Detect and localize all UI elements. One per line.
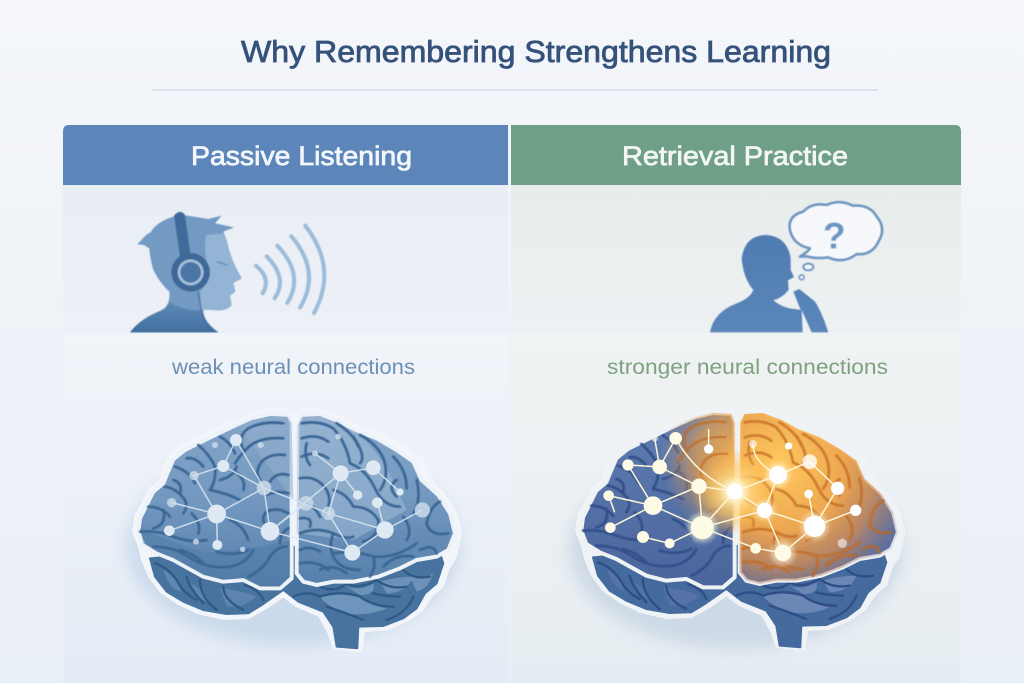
brain: weak connections (127, 412, 460, 649)
panel: passive listening (63, 125, 508, 683)
neural network: bright nodes and links (603, 429, 861, 565)
panel: retrieval practice (511, 125, 961, 683)
thought bubble (790, 202, 882, 280)
thought bubble: ? (823, 214, 846, 256)
header: retrieval practice (511, 125, 961, 185)
header: passive listening (63, 125, 508, 185)
header: retrieval practice: Retrieval Practice (622, 141, 848, 171)
orange activation glow (664, 413, 898, 584)
neural network: faint nodes and links (164, 434, 430, 561)
header: passive listening: Passive Listening (191, 141, 412, 171)
icon: person with headphones and sound waves (130, 212, 324, 332)
brain: strong connections (570, 411, 903, 649)
title: Why Remembering Strengthens Learning (241, 34, 831, 69)
label: stronger neural connections: stronger neural connections (607, 356, 888, 379)
label: weak neural connections: weak neural connections (171, 356, 415, 379)
icon: thinking person with question bubble (710, 202, 882, 332)
